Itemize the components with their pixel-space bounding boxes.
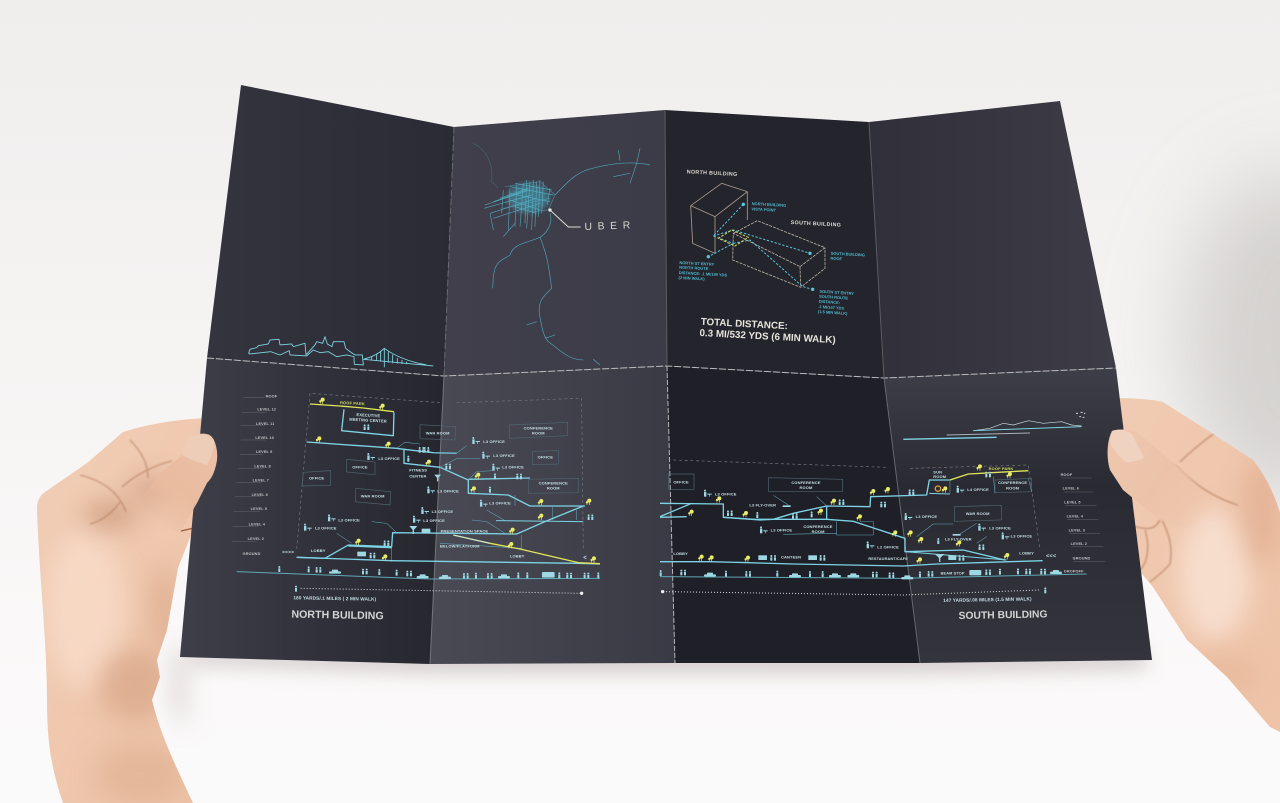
boundary dashes (673, 460, 887, 467)
level labels: LEVEL 9 (256, 450, 272, 454)
level labels: LEVEL 2 (248, 537, 264, 541)
level labels: LEVEL 7 (253, 479, 269, 483)
room labels: L3 OFFICE (483, 439, 505, 444)
panel: top second (444, 110, 667, 376)
street icons (660, 568, 1062, 579)
room labels: L3 OFFICE (989, 525, 1011, 530)
level labels (243, 395, 278, 556)
room labels (282, 439, 587, 561)
roof park: ROOF PARK (340, 400, 365, 406)
room labels: LOBBY (311, 548, 326, 553)
level labels: LEVEL 10 (255, 436, 274, 440)
room boxes: OFFICE (352, 464, 368, 469)
room labels: L3 OFFICE (715, 492, 737, 497)
boundary dashes (297, 393, 440, 550)
roof park (310, 398, 394, 412)
level lines and stairs (660, 471, 1043, 566)
people and office icons (304, 437, 593, 558)
label: vista point: NORTH BUILDING (752, 201, 786, 208)
level labels: LEVEL 12 (257, 408, 276, 412)
room boxes: CONFERENCE (998, 480, 1027, 485)
room labels: L3 OFFICE (771, 528, 792, 533)
room labels: L3 OFFICE (916, 514, 937, 519)
label: south distance: (1.5 MIN WALK) (818, 309, 848, 316)
room labels: L3 FLY-OVER (945, 537, 972, 542)
room labels: L3 OFFICE (432, 509, 453, 514)
right thumb over sheet (1108, 429, 1217, 530)
label: south distance: DISTANCE: (819, 299, 840, 305)
left hand fingers and wrist behind sheet (37, 418, 202, 803)
label: south roof: ROOF (830, 256, 843, 261)
level labels: LEVEL 6 (252, 493, 268, 497)
room labels: BELOW/PLATFORM (440, 544, 480, 549)
label: south building: SOUTH BUILDING (791, 220, 841, 229)
room labels: SUN (933, 469, 942, 474)
trees (316, 436, 596, 563)
label: north distance: NORTH ROUTE (679, 265, 709, 271)
label: south roof: SOUTH BUILDING (831, 251, 865, 257)
panel: top third (665, 110, 884, 378)
room labels: CONFERENCE (803, 524, 833, 529)
panel: top right (869, 101, 1116, 378)
trees (688, 464, 1012, 564)
Uber callout (548, 208, 636, 233)
walking distance south (661, 587, 1046, 603)
room labels: CANTEEN (781, 554, 801, 559)
right level labels: DROPOFF (1064, 569, 1084, 573)
room boxes: ROOM (547, 486, 560, 491)
room labels (673, 466, 1057, 561)
walking distance south: 147 YARDS/.08 MILES (1.5 MIN WALK) (943, 596, 1032, 603)
room labels: L3 OFFICE (338, 517, 360, 522)
label: north distance: DISTANCE: .1 MI/180 YDS (679, 270, 728, 278)
right level labels: LEVEL 4 (1067, 514, 1084, 518)
right level labels (1061, 473, 1105, 573)
room boxes: OFFICE (673, 479, 689, 484)
street line (660, 574, 1087, 578)
cross-section: south building side (660, 460, 1105, 622)
level labels: GROUND (243, 552, 261, 556)
right level labels: GROUND (1073, 557, 1091, 561)
room boxes: OFFICE (538, 455, 553, 460)
room labels: CENTER (409, 474, 426, 479)
level labels: LEVEL 5 (251, 507, 268, 511)
left thumbnail (182, 434, 214, 465)
executive meeting centre: EXECUTIVE (356, 412, 381, 418)
room labels: PRESENTATION SPACE (441, 528, 488, 533)
room boxes: WAR ROOM (966, 511, 990, 516)
left thumb over sheet (140, 434, 217, 533)
label: south distance: SOUTH ROUTE (819, 294, 849, 301)
room labels: L3 OFFICE (489, 501, 511, 506)
panel: bottom left (180, 358, 444, 664)
right hand behind sheet (1120, 398, 1280, 732)
label: south distance: .1 MI/147 YDS (818, 304, 845, 311)
room labels: L3 OFFICE (493, 453, 515, 458)
map of San Francisco with Uber callout (473, 143, 650, 365)
north building outline (691, 183, 747, 253)
room boxes (302, 422, 578, 505)
label: south distance: SOUTH ST ENTRY (819, 289, 854, 296)
room boxes: OFFICE (309, 476, 325, 481)
right level labels: ROOF (1061, 473, 1073, 477)
room labels: L3 OFFICE (315, 526, 337, 531)
level labels: LEVEL 11 (256, 422, 275, 426)
room labels: L3 OFFICE (437, 489, 459, 494)
room labels: ROOF PARK (989, 466, 1013, 471)
label: north distance: (2 MIN WALK) (678, 275, 706, 281)
room labels: <<< (1046, 553, 1057, 559)
level lines and stairs (297, 442, 600, 564)
room labels: L4 OFFICE (967, 487, 989, 492)
panel: bottom third (667, 366, 920, 663)
room boxes: ROOM (800, 485, 813, 490)
Uber callout: UBER (584, 220, 636, 233)
executive meeting centre: MEETING CENTER (349, 417, 387, 424)
room labels: LOBBY (673, 551, 688, 556)
street icons (278, 566, 599, 579)
panel: bottom second (430, 366, 675, 664)
south building heading: SOUTH BUILDING (958, 609, 1048, 622)
label: north building: NORTH BUILDING (687, 169, 738, 178)
panel: bottom right (884, 368, 1152, 663)
bridge highlight (718, 230, 748, 246)
right level labels: LEVEL 6 (1063, 487, 1079, 491)
walking distance north (293, 586, 583, 602)
coastline illustration with birds (903, 412, 1085, 439)
room boxes: WAR ROOM (361, 493, 385, 498)
level labels: LEVEL 4 (249, 522, 266, 526)
room boxes: CONFERENCE (791, 480, 821, 485)
room labels: FITNESS (409, 468, 427, 473)
room labels: L3 OFFICE (423, 518, 445, 523)
right level labels: LEVEL 2 (1071, 542, 1087, 546)
paper shadow (190, 650, 1146, 672)
room labels: < (583, 555, 587, 561)
room labels: L3 FLY-OVER (749, 503, 776, 508)
room boxes (668, 474, 1032, 521)
label: north distance: NORTH ST ENTRY (679, 260, 715, 267)
label: vista point: VISTA POINT (751, 206, 777, 213)
isometric building diagram (678, 169, 865, 346)
total distance heading: TOTAL DISTANCE: (700, 317, 788, 332)
room boxes: ROOM (532, 431, 545, 436)
right thumbnail (1110, 430, 1144, 462)
room labels: LOBBY (1019, 551, 1034, 556)
room labels: ROOM (933, 474, 947, 479)
room labels: L3 OFFICE (1011, 533, 1032, 538)
room labels: >>>> (282, 549, 294, 555)
panel: top left (207, 85, 454, 376)
walking route (708, 204, 813, 289)
total distance heading: 0.3 MI/532 YDS (6 MIN WALK) (699, 328, 836, 346)
room boxes: ROOM (1006, 485, 1020, 490)
right level labels: LEVEL 5 (1064, 501, 1081, 505)
executive meeting centre (342, 409, 394, 436)
street icons: BEAM STOP (941, 571, 965, 575)
north building heading: NORTH BUILDING (291, 609, 384, 622)
room labels: RESTAURANT/CAFE (868, 557, 908, 561)
level labels: ROOF (266, 395, 278, 399)
right level labels: LEVEL 3 (1069, 529, 1085, 533)
cross-section: north building side (232, 393, 600, 622)
street grid glow (508, 183, 549, 213)
people icons (704, 472, 1009, 562)
room boxes: CONFERENCE (539, 480, 568, 485)
walking distance north: 180 YARDS/.1 MILES ( 2 MIN WALK) (293, 595, 377, 602)
room labels: L3 OFFICE (378, 456, 400, 461)
room boxes: CONFERENCE (524, 426, 553, 431)
skyline illustration (249, 337, 433, 367)
room boxes: WAR ROOM (426, 430, 450, 435)
south building outline (733, 221, 825, 287)
street line (237, 572, 600, 579)
room labels: LOBBY (510, 553, 525, 558)
room labels: L3 OFFICE (502, 465, 524, 470)
folded map sheet (180, 85, 1152, 664)
room labels: L2 OFFICE (877, 545, 899, 550)
room labels: ROOM (812, 529, 825, 534)
level labels: LEVEL 8 (254, 464, 271, 468)
